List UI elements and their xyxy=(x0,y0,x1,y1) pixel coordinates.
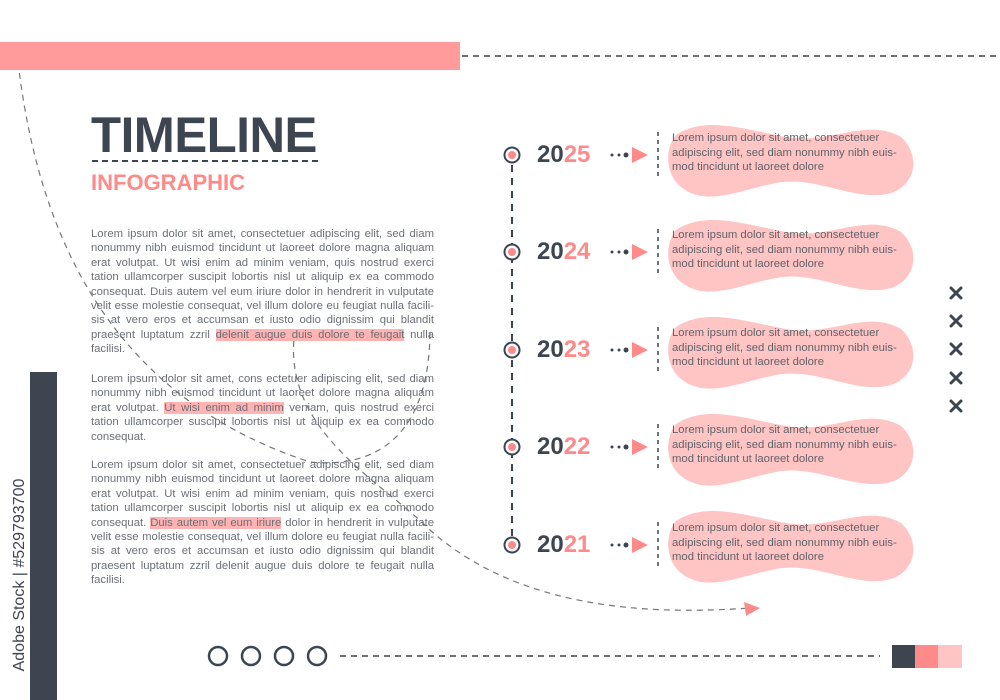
top pink bar xyxy=(0,42,460,70)
year 2023: 2023 xyxy=(537,336,590,363)
subtitle: INFOGRAPHIC xyxy=(91,170,245,195)
vertical stock text: Adobe Stock | #529793700 xyxy=(11,479,28,671)
text 2025: Lorem ipsum dolor sit amet, consectetuer adipiscing elit, sed diam nonummy nibh euis-mod tincidunt ut laoreet dolore xyxy=(672,132,897,173)
year 2025: 2025 xyxy=(537,141,590,168)
text 2021: Lorem ipsum dolor sit amet, consectetuer adipiscing elit, sed diam nonummy nibh euis-mod tincidunt ut laoreet dolore xyxy=(672,522,897,563)
paragraph 2: Lorem ipsum dolor sit amet, cons ectetuer adipiscing elit, sed diam nonummy nibh euismod tincidunt ut laoreet dolore magna aliquam erat volutpat. Ut wisi enim ad minim veniam, quis nostrud exerci tation ullamcorper suscipit lobortis nisl ut aliquip ex ea commodo consequat. xyxy=(91,373,434,443)
text 2024: Lorem ipsum dolor sit amet, consectetuer adipiscing elit, sed diam nonummy nibh euis-mod tincidunt ut laoreet dolore xyxy=(672,229,897,270)
paragraph 3: Lorem ipsum dolor sit amet, consectetuer adipiscing elit, sed diam nonummy nibh euismod tincidunt ut laoreet dolore magna aliquam erat volutpat. Ut wisi enim ad minim veniam, quis nostrud exerci tation ullamcorper suscipit lobortis nisl ut aliquip ex ea commodo consequat. Duis autem vel eum iriure dolor in hendrerit in vulputate velit esse molestie consequat, vel illum dolore eu feugiat nulla facili­sis at vero eros et accumsan et iusto odio dignissim qui blandit praesent luptatum zzril delenit augue duis dolore te feugait nulla facilisi. xyxy=(91,459,434,586)
bottom circles xyxy=(208,646,328,666)
x marks xyxy=(949,286,963,413)
text 2023: Lorem ipsum dolor sit amet, consectetuer adipiscing elit, sed diam nonummy nibh euis-mod tincidunt ut laoreet dolore xyxy=(672,327,897,368)
timeline items xyxy=(504,125,914,583)
arrow head xyxy=(744,602,760,616)
title: TIMELINE xyxy=(91,107,317,163)
left dark bar xyxy=(30,372,57,700)
title underline xyxy=(92,160,318,162)
text 2022: Lorem ipsum dolor sit amet, consectetuer adipiscing elit, sed diam nonummy nibh euis-mod tincidunt ut laoreet dolore xyxy=(672,424,897,465)
year 2022: 2022 xyxy=(537,433,590,460)
year 2024: 2024 xyxy=(537,238,590,265)
color squares xyxy=(892,645,962,668)
paragraph 1: Lorem ipsum dolor sit amet, consectetuer adipiscing elit, sed diam nonummy nibh euismod tincidunt ut laoreet dolore magna aliquam erat volutpat. Ut wisi enim ad minim veniam, quis nostrud exerci tation ullamcorper suscipit lobortis nisl ut aliquip ex ea commodo consequat. Duis autem vel eum iriure dolor in hendrerit in vulputate velit esse molestie consequat, vel illum dolore eu feugiat nulla facili­sis at vero eros et accumsan et iusto odio dignissim qui blandit praesent luptatum zzril delenit augue duis dolore te feugait nulla facilisi. xyxy=(91,228,434,355)
year 2021: 2021 xyxy=(537,531,590,558)
